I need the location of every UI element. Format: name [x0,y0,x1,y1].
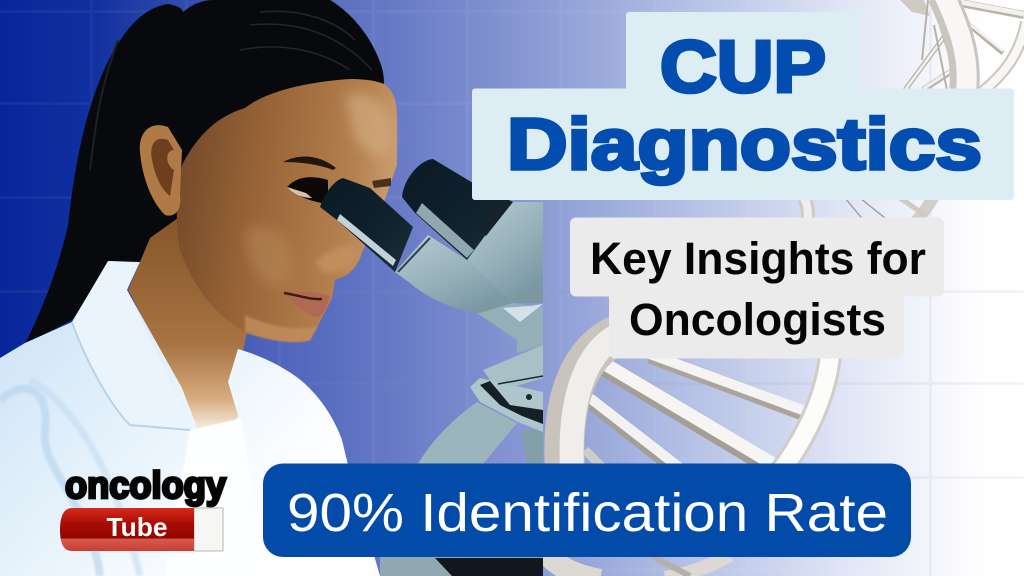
stat pill: 90% Identification Rate: 90% Identification Rate [287,483,888,543]
microscope head [467,202,543,303]
microscope nosepiece [477,303,543,353]
logo tube bar: Tube [106,512,168,542]
microscope rear eyepiece [402,159,513,260]
eyebrow [283,156,336,170]
subtitle line 2: Oncologists [629,294,886,345]
logo: oncology Tube [60,465,227,551]
stat pill: 90% Identification Rate [263,464,911,557]
eye [287,177,328,204]
face [177,79,397,342]
logo tube bar [60,508,223,551]
person [0,0,397,576]
title panel: CUP Diagnostics [472,12,1014,200]
neck [128,218,250,430]
title line: Diagnostics: Diagnostics [507,105,982,185]
hair and ponytail [25,0,384,344]
microscope grey body [395,235,513,313]
ear [140,125,182,216]
microscope base and arm [380,402,543,576]
microscope [320,159,543,576]
microscope stage [470,345,543,432]
logo wordmark: oncology [65,465,227,507]
microscope front eyepiece [320,178,413,272]
second eyebrow [372,178,391,188]
title line: CUP: CUP [660,27,826,108]
lips [284,291,330,317]
DNA helix, upper right [804,0,1024,222]
subtitle panel: Key Insights for Oncologists [570,218,944,358]
lab coat [0,261,380,576]
subtitle line 1: Key Insights for [590,233,926,284]
DNA helix, lower centre [545,332,830,576]
